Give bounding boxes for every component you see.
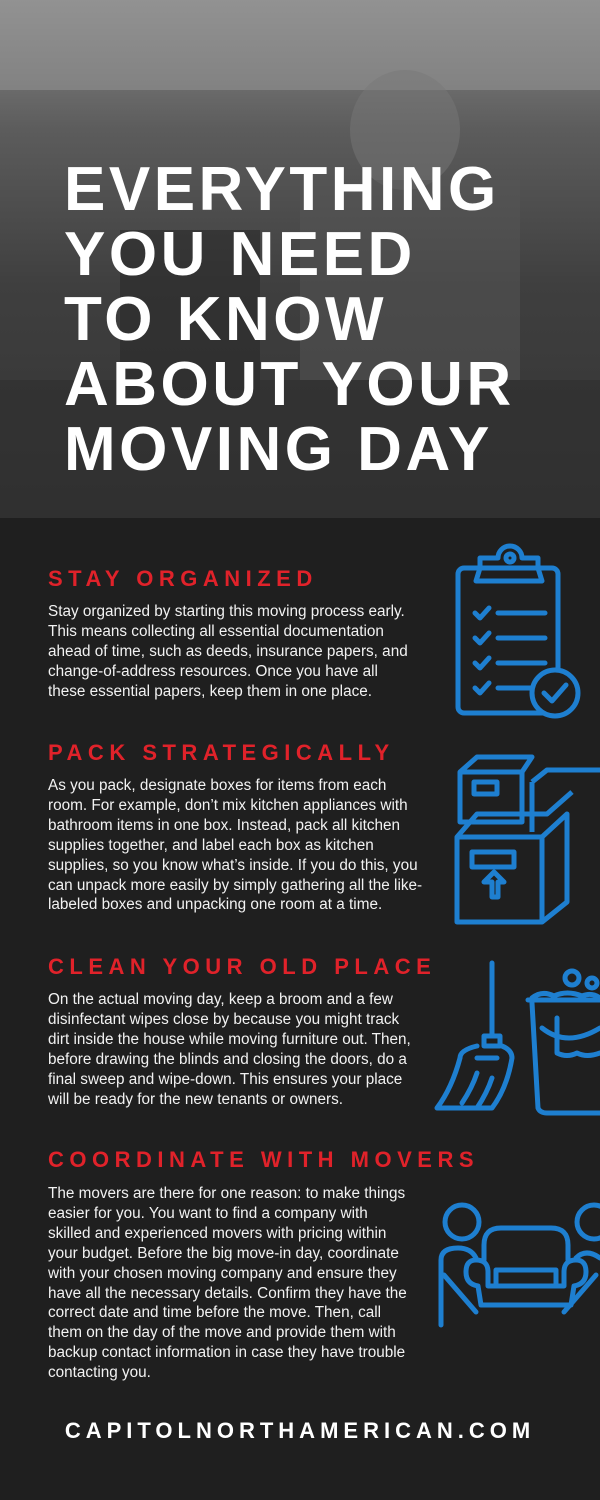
text: stay organized: Stay organized by starting this moving process early. [48, 603, 405, 620]
icon: clipboard [456, 544, 580, 718]
text: pack strategically: room. For example, don’t mix kitchen appliances with [48, 797, 408, 814]
text: coordinate: contacting you. [48, 1364, 151, 1381]
icon: movers carrying couch [438, 1202, 600, 1328]
text: pack strategically: labeled boxes and unpacking one room at a time. [48, 896, 382, 913]
text: clean [48, 991, 411, 1108]
icon: boxes [454, 754, 600, 924]
text: clean: dirt inside the house while moving furniture out. Then, [48, 1031, 411, 1048]
heading: stay organized: STAY ORGANIZED [48, 566, 318, 591]
text: coordinate: easier for you. You want to find a company with [48, 1205, 368, 1222]
footer url: CAPITOLNORTHAMERICAN.COM [65, 1418, 535, 1443]
text: pack strategically: As you pack, designate boxes for items from each [48, 777, 386, 794]
heading: clean your old place: CLEAN YOUR OLD PLACE [48, 954, 436, 979]
text: clean: disinfectant wipes close by because you might track [48, 1011, 399, 1028]
title: TO KNOW [64, 285, 387, 354]
text: coordinate: your budget. Before the big move-in day, coordinate [48, 1245, 399, 1262]
text: coordinate: have all the necessary details. Confirm they have the [48, 1285, 407, 1302]
title [64, 155, 515, 484]
text: coordinate: skilled and experienced movers with pricing within [48, 1225, 386, 1242]
title: MOVING DAY [64, 415, 493, 484]
text: coordinate [48, 1185, 407, 1381]
text: coordinate: The movers are there for one reason: to make things [48, 1185, 405, 1202]
text: stay organized [48, 603, 408, 700]
text: coordinate: them on the day of the move and provide them with [48, 1324, 396, 1341]
text: clean: will be ready for the new tenants or owners. [48, 1091, 343, 1108]
text: pack strategically: can unpack more easily by simply gathering all the like- [48, 877, 422, 894]
text: coordinate: backup contact information in case they have trouble [48, 1344, 405, 1361]
text: clean: final sweep and wipe-down. This ensures your place [48, 1071, 402, 1088]
text: clean: before drawing the blinds and closing the doors, do a [48, 1051, 407, 1068]
title: ABOUT YOUR [64, 350, 515, 419]
heading: coordinate with movers: COORDINATE WITH MOVERS [48, 1147, 479, 1172]
text: pack strategically: supplies, so you know what’s inside. If you do this, you [48, 857, 418, 874]
heading: pack strategically: PACK STRATEGICALLY [48, 740, 395, 765]
title: YOU NEED [64, 220, 416, 289]
text: stay organized: these essential papers, keep them in one place. [48, 683, 372, 700]
text: pack strategically: bathroom items in one box. Instead, pack all kitchen [48, 817, 400, 834]
text: pack strategically: supplies together, and label each box as kitchen [48, 837, 374, 854]
text: stay organized: ahead of time, such as deeds, insurance papers, and [48, 643, 408, 660]
text: coordinate: with your chosen moving company and ensure they [48, 1265, 397, 1282]
icon: broom and bucket [434, 960, 600, 1116]
text: stay organized: This means collecting all essential documentation [48, 623, 384, 640]
title: EVERYTHING [64, 155, 500, 224]
text: stay organized: change-of-address resources. Once you have all [48, 663, 378, 680]
text: coordinate: correct date and time before the move. Then, call [48, 1304, 381, 1321]
header photo [0, 0, 600, 518]
text: clean: On the actual moving day, keep a broom and a few [48, 991, 393, 1008]
text: pack strategically [48, 777, 422, 913]
